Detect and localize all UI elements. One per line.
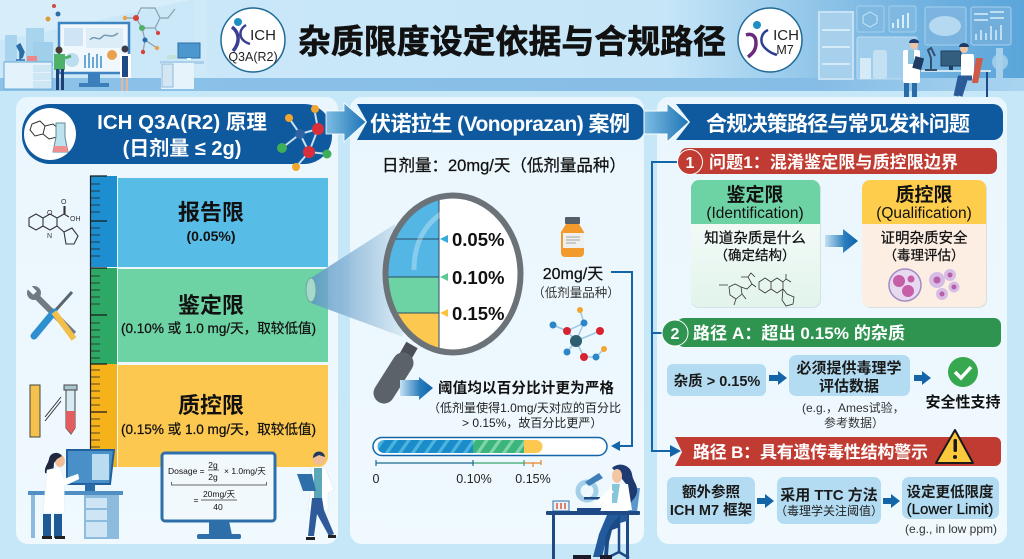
arrow: step 2 to result xyxy=(914,371,931,385)
magnifier scale labels xyxy=(440,229,504,324)
arrow: step 1 to step 2 xyxy=(769,371,787,385)
flow connector xyxy=(652,162,681,457)
card: qualification limit: 证明杂质安全 xyxy=(880,229,968,247)
card: identification limit: （确定结构） xyxy=(714,248,796,263)
formula monitor: 2g xyxy=(208,460,218,470)
examples note: 参考数据） xyxy=(824,415,884,430)
dose callout: （低剂量品种） xyxy=(532,285,620,300)
step: toxicology data xyxy=(789,355,910,396)
result label: 安全性支持 xyxy=(925,393,1001,411)
path A banner: 路径 A：超出 0.15% 的杂质 xyxy=(693,323,905,343)
threshold block: identification: 鉴定限 xyxy=(178,293,244,318)
bar scale: 0 xyxy=(373,472,380,486)
threshold block: reporting: (0.05%) xyxy=(186,228,236,244)
step: toxicology data: 评估数据 xyxy=(819,377,879,395)
icon: chemical structure: OH xyxy=(70,216,80,223)
illustration: scientist at microscope xyxy=(546,465,640,559)
path A banner xyxy=(662,318,1001,347)
threshold block: reporting: 报告限 xyxy=(178,200,244,225)
icon: small lens xyxy=(306,278,316,302)
icon: ruler and test tube xyxy=(30,385,77,437)
panel heading: 伏诺拉生 (Vonoprazan) 案例 xyxy=(370,112,630,136)
bar scale xyxy=(373,460,551,486)
illustration: scientist with clipboard xyxy=(297,451,336,540)
dose callout: 20mg/天 xyxy=(543,266,603,283)
step: lower limit xyxy=(902,477,999,519)
examples note: (e.g.，Ames试验， xyxy=(802,400,905,415)
path B flow xyxy=(667,477,999,536)
threshold block: reporting xyxy=(118,178,328,267)
formula monitor: × 1.0mg/天 xyxy=(224,466,266,476)
panel: compliance decision path xyxy=(644,97,1007,544)
path B banner xyxy=(675,437,1001,466)
conclusion text: > 0.15%，故百分比更严） xyxy=(462,415,602,430)
examples note xyxy=(802,400,905,430)
threshold block: identification: (0.10% 或 1.0 mg/天，取较低值) xyxy=(121,321,316,336)
illustration: scientist at desk xyxy=(28,450,123,539)
icon: cells xyxy=(889,269,960,301)
card: qualification limit: 质控限 xyxy=(895,183,953,206)
panel heading pill: (日剂量 ≤ 2g) xyxy=(123,136,241,160)
logo: ICH Q3A(R2) xyxy=(221,8,285,72)
magnifier xyxy=(380,190,520,393)
logo: ICH M7: M7 xyxy=(776,43,794,57)
conclusion text: 阈值均以百分比计更为严格 xyxy=(438,379,614,397)
title: 杂质限度设定依据与合规路径 xyxy=(298,23,726,60)
step: ICH M7: 额外参照 xyxy=(682,483,740,501)
dose callout xyxy=(532,266,620,300)
formula monitor: 20mg/天 xyxy=(203,489,236,499)
card: qualification limit: (Qualification) xyxy=(876,205,972,222)
threshold block: qualification: (0.15% 或 1.0 mg/天，取较低值) xyxy=(121,422,316,437)
panel heading xyxy=(676,104,1003,140)
formula monitor: 40 xyxy=(213,502,223,512)
step: TTC: （毒理学关注阈值） xyxy=(775,503,883,518)
formula monitor xyxy=(162,453,275,539)
step: ICH M7 xyxy=(667,477,755,524)
icon: chemical structure xyxy=(29,199,80,244)
icon: chemical structure: O xyxy=(47,210,53,217)
icon: molecule xyxy=(550,307,607,361)
icon: ball and stick molecule xyxy=(277,105,332,171)
daily dose label: 日剂量：20mg/天（低剂量品种） xyxy=(382,156,626,175)
magnifier scale labels: 0.10% xyxy=(452,267,504,288)
threshold block: qualification xyxy=(118,365,328,467)
formula monitor: 2g xyxy=(208,472,218,482)
icon: chemical structure: O xyxy=(61,199,67,206)
panel heading pill: ICH Q3A(R2) 原理 xyxy=(97,111,267,134)
step: lower limit: (Lower Limit) xyxy=(907,501,993,518)
issue 1 banner: 问题1：混淆鉴定限与质控限边界 xyxy=(709,152,958,172)
formula monitor: Dosage = xyxy=(168,466,205,476)
arrow: step A to step B xyxy=(757,494,774,508)
icon: warning triangle xyxy=(936,430,973,463)
step: impurity over limit: 杂质 > 0.15% xyxy=(674,372,760,390)
zoom cone xyxy=(311,224,403,337)
threshold block: qualification: 质控限 xyxy=(178,393,244,418)
icon: molecule and flask xyxy=(24,108,76,160)
arrow: identification to qualification xyxy=(825,229,858,253)
step: TTC xyxy=(775,477,883,524)
header right lab illustration xyxy=(819,6,1011,98)
magnifier scale labels: 0.15% xyxy=(452,303,504,324)
panel heading pill xyxy=(22,104,332,164)
card: qualification limit: （毒理评估） xyxy=(884,248,964,263)
path B banner: 路径 B：具有遗传毒性结构警示 xyxy=(693,442,928,462)
header left lab illustration xyxy=(4,4,204,91)
step: toxicology data: 必须提供毒理学 xyxy=(796,359,902,377)
logo: ICH Q3A(R2): Q3A(R2) xyxy=(228,50,278,64)
bar scale: 0.10% xyxy=(456,472,492,486)
icon: medicine bottle xyxy=(561,217,584,257)
panel heading xyxy=(357,104,644,140)
conclusion text xyxy=(428,379,621,430)
issue 1 banner xyxy=(678,148,997,174)
icon: wrench and screwdriver xyxy=(27,286,74,339)
logo: ICH Q3A(R2): ICH xyxy=(250,27,276,44)
card: identification limit: 鉴定限 xyxy=(726,183,784,206)
arrow: middle panel to right panel xyxy=(644,103,689,142)
magnifier scale labels: 0.05% xyxy=(452,229,504,250)
arrow: left panel to middle panel xyxy=(326,103,366,142)
lower limit note: (e.g., in low ppm) xyxy=(905,522,997,536)
header banner xyxy=(0,0,1024,98)
bar scale: 0.15% xyxy=(515,472,551,486)
panel: Vonoprazan case xyxy=(306,97,644,559)
icon: check mark xyxy=(948,357,978,387)
icon: chemical structures xyxy=(719,273,794,306)
arrow to conclusion xyxy=(400,377,433,400)
step: impurity over limit xyxy=(667,364,766,396)
card: identification limit xyxy=(691,180,821,308)
card: identification limit: 知道杂质是什么 xyxy=(704,230,806,247)
progress bar xyxy=(373,438,607,456)
conclusion text: （低剂量使得1.0mg/天对应的百分比 xyxy=(428,400,621,415)
issue 1 banner: 1 xyxy=(686,155,695,172)
step: TTC: 采用 TTC 方法 xyxy=(780,486,878,504)
card: qualification limit xyxy=(862,180,987,308)
threshold block: identification xyxy=(118,269,328,362)
logo: ICH M7 xyxy=(738,8,802,72)
path A banner: 2 xyxy=(671,326,680,343)
card: identification limit: (Identification) xyxy=(706,205,804,222)
step: ICH M7: ICH M7 框架 xyxy=(670,501,753,519)
connector arrow to bar xyxy=(611,272,632,451)
formula monitor: = xyxy=(194,495,199,505)
logo: ICH M7: ICH xyxy=(773,27,799,44)
path A flow xyxy=(667,355,1001,430)
panel: ICH Q3A(R2) principles xyxy=(16,97,338,544)
ruler scale xyxy=(90,176,117,467)
panel heading: 合规决策路径与常见发补问题 xyxy=(706,113,970,136)
step: lower limit: 设定更低限度 xyxy=(906,483,994,501)
arrow: step B to step C xyxy=(883,494,900,508)
icon: chemical structure: N xyxy=(47,233,52,240)
